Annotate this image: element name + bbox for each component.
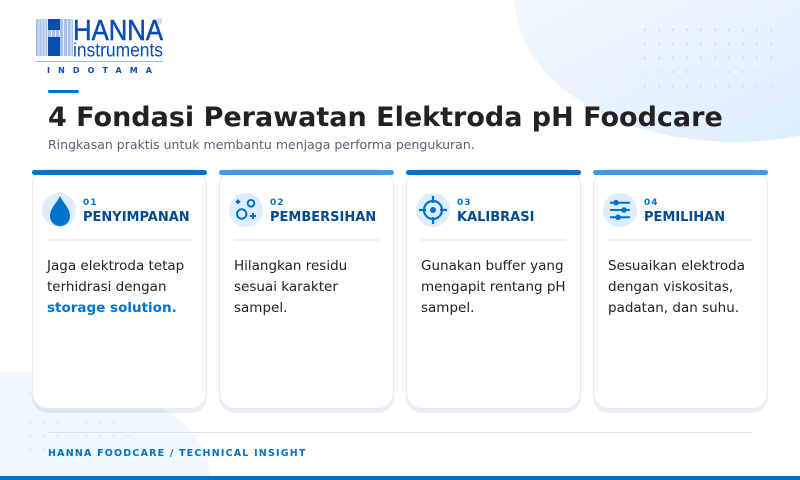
icon: bubbles <box>229 193 263 227</box>
icon: water drop <box>42 193 76 227</box>
panel: penyimpanan: PENYIMPANAN <box>83 210 190 225</box>
panel: kalibrasi <box>406 169 581 413</box>
footer text: HANNA FOODCARE / TECHNICAL INSIGHT <box>48 448 307 459</box>
text: penyimpanan: storage solution. <box>47 300 177 316</box>
title: 4 Fondasi Perawatan Elektroda pH Foodcare <box>48 102 723 133</box>
footer rule <box>48 432 752 433</box>
panel: pembersihan: 02 <box>270 198 285 208</box>
title accent line <box>48 90 79 93</box>
subtitle: Ringkasan praktis untuk membantu menjaga performa pengukuran. <box>48 137 475 152</box>
panel: kalibrasi: 03 <box>457 198 472 208</box>
text: pembersihan <box>234 258 347 316</box>
panel: pemilihan: PEMILIHAN <box>644 210 725 225</box>
panel: pembersihan <box>219 169 394 413</box>
panel: penyimpanan <box>32 169 207 413</box>
icon: sliders <box>603 193 637 227</box>
panel: pemilihan: 04 <box>644 198 659 208</box>
text: penyimpanan: Jaga elektroda tetap <box>47 258 184 274</box>
text: pembersihan: Hilangkan residu <box>234 258 347 274</box>
text: kalibrasi: mengapit rentang pH <box>421 279 566 295</box>
text: kalibrasi <box>421 258 566 316</box>
bottom bar <box>0 476 800 480</box>
text: pemilihan <box>608 258 745 316</box>
panel: penyimpanan: 01 <box>83 198 98 208</box>
text: pemilihan: Sesuaikan elektroda <box>608 258 745 274</box>
text: kalibrasi: Gunakan buffer yang <box>421 258 564 274</box>
text: pembersihan: sampel. <box>234 300 287 316</box>
logo: Hanna Instruments Indotama <box>36 18 164 75</box>
text: pemilihan: padatan, dan suhu. <box>608 300 739 316</box>
text: pembersihan: sesuai karakter <box>234 279 338 295</box>
icon: target <box>416 193 450 227</box>
panel: pemilihan <box>593 169 768 413</box>
panel: kalibrasi: KALIBRASI <box>457 210 534 225</box>
text: pemilihan: dengan viskositas, <box>608 279 733 295</box>
text: penyimpanan: terhidrasi dengan <box>47 279 167 295</box>
logo: Hanna Instruments Indotama: ® <box>157 18 163 26</box>
text: penyimpanan <box>46 258 184 316</box>
text: kalibrasi: sampel. <box>421 300 474 316</box>
logo: Hanna Instruments Indotama: INDOTAMA <box>47 66 153 75</box>
panel: pembersihan: PEMBERSIHAN <box>270 210 376 225</box>
